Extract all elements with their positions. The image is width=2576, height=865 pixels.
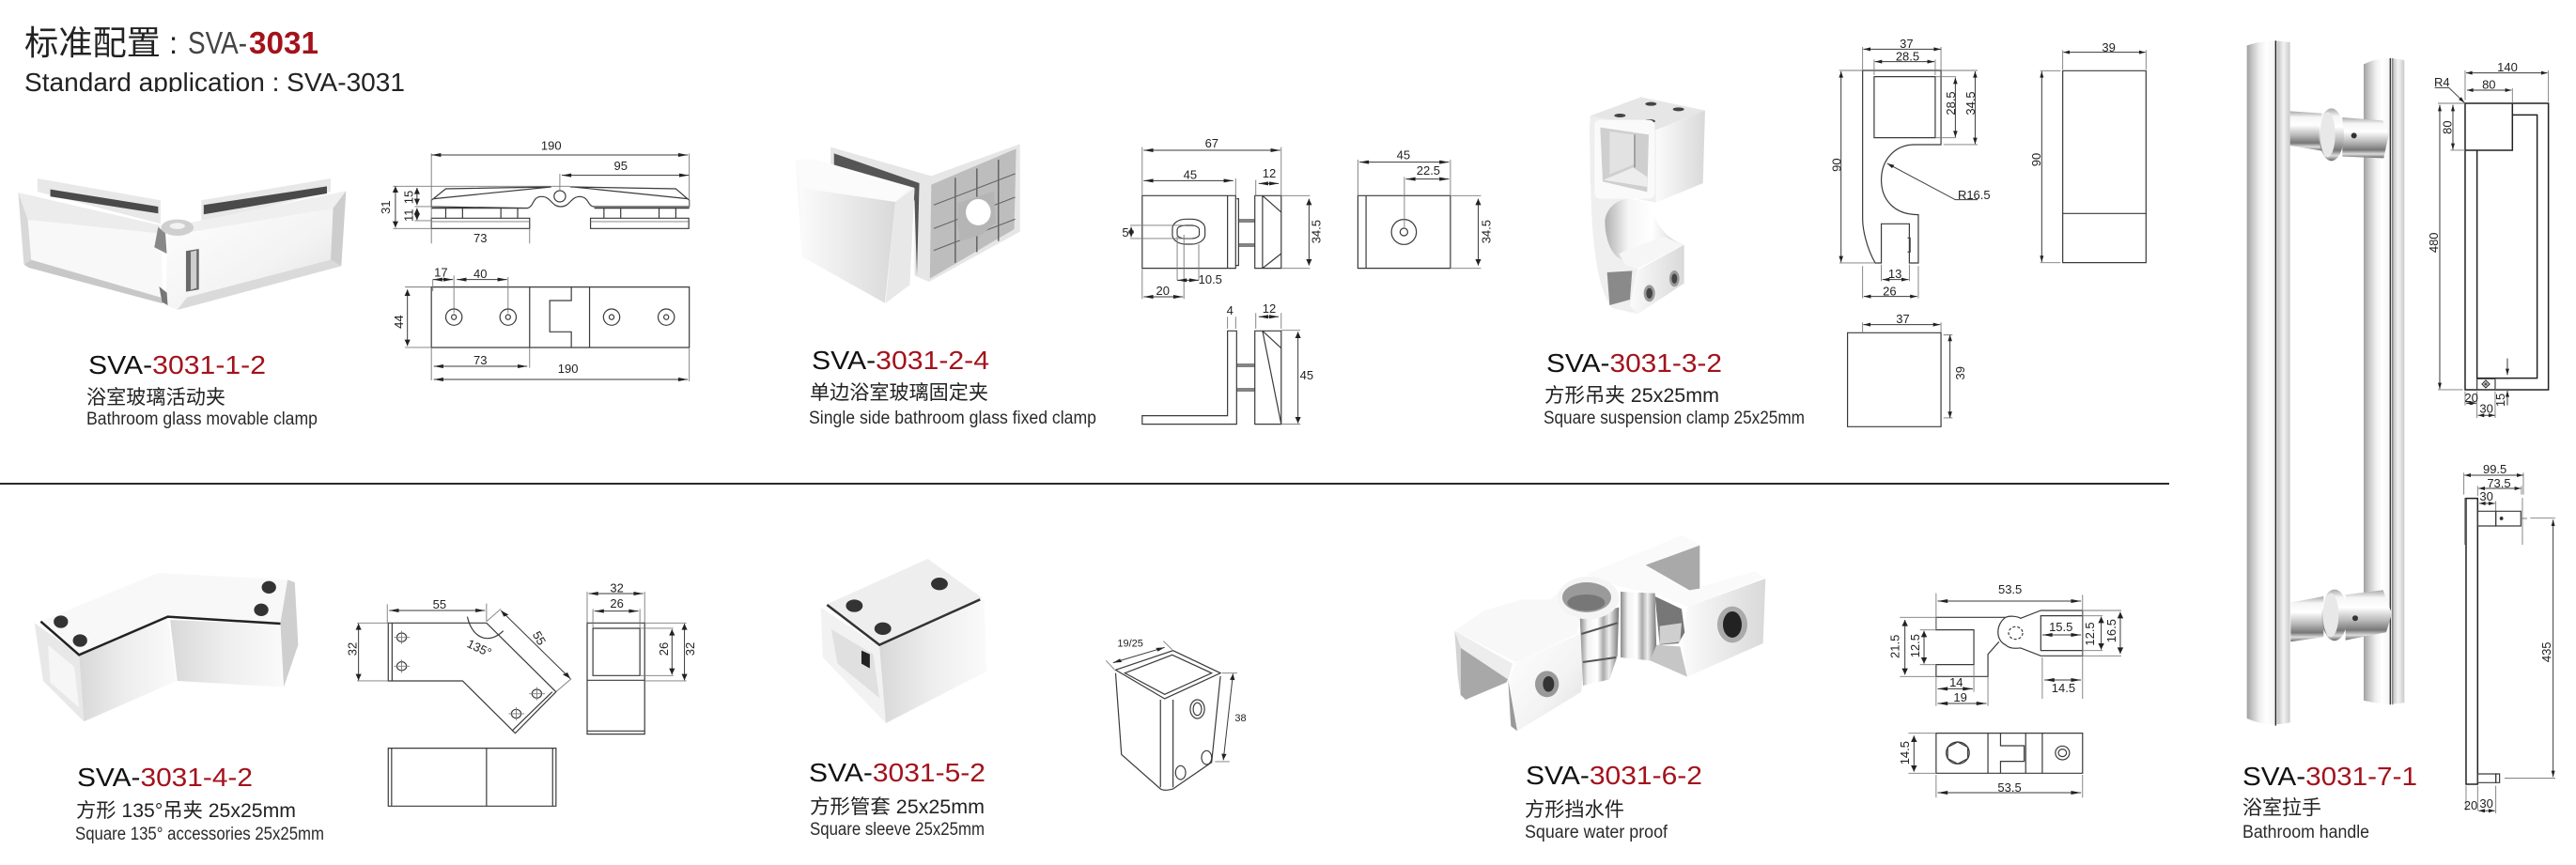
drawing: handle side view: 73.5	[2487, 476, 2511, 490]
drawing: suspension clamp side view: 90	[1830, 158, 1844, 172]
drawing: 135 degree accessory views	[345, 580, 697, 806]
drawing: suspension clamp side view: 28.5	[1944, 91, 1958, 116]
drawing: movable clamp top and plan views: 44	[392, 315, 406, 329]
drawing: fixed clamp views: 10.5	[1199, 272, 1222, 286]
label: SVA-3031-3-2	[1544, 348, 1805, 428]
label: SVA-3031-6-2: 方形挡水件	[1525, 799, 1624, 821]
label: SVA-3031-4-2: 方形 135°吊夹 25x25mm	[76, 800, 296, 822]
drawing: handle side view: 20	[2464, 798, 2477, 812]
drawing: movable clamp top and plan views: 73	[473, 231, 487, 245]
drawing: suspension clamp front view: 39	[2102, 40, 2116, 54]
drawing: 135 degree accessory views: 135°	[465, 637, 494, 659]
drawing: water proof views: 14.5	[1898, 741, 1912, 765]
drawing: handle side view: 30	[2479, 796, 2493, 811]
drawing: fixed clamp views: 4	[1227, 303, 1234, 317]
drawing: 135 degree accessory views: 55	[433, 597, 446, 611]
drawing: movable clamp top and plan views	[379, 138, 690, 381]
drawing: water proof views: 53.5	[1998, 582, 2022, 596]
drawing: movable clamp top and plan views: 40	[473, 267, 487, 281]
drawing: fixed clamp views: 22.5	[1417, 163, 1440, 178]
drawing: movable clamp top and plan views: 31	[379, 200, 393, 214]
drawing: water proof views: 53.5	[1997, 780, 2022, 795]
drawing: water proof views: 12.5	[2083, 622, 2097, 646]
drawing: 135 degree accessory views: 32	[610, 580, 624, 595]
drawing: fixed clamp views: 67	[1205, 136, 1218, 150]
drawing: suspension clamp side view: 13	[1888, 267, 1901, 281]
label: SVA-3031-2-4: SVA-3031-2-4	[812, 346, 989, 375]
photo: movable clamp	[18, 178, 346, 310]
drawing: fixed clamp views: 12	[1263, 166, 1276, 180]
drawing: suspension clamp side view: R16.5	[1958, 188, 1991, 202]
drawing: water proof views: 19	[1953, 690, 1967, 704]
label: SVA-3031-5-2: Square sleeve 25x25mm	[810, 820, 985, 840]
label: SVA-3031-5-2	[809, 758, 985, 840]
drawing: suspension clamp side view: 26	[1883, 284, 1897, 298]
drawing: movable clamp top and plan views: 190	[541, 138, 562, 152]
drawing: fixed clamp views: 45	[1300, 368, 1313, 382]
label: SVA-3031-7-1: SVA-3031-7-1	[2242, 762, 2417, 791]
photo: square sleeve	[821, 559, 986, 723]
drawing: water proof views: 21.5	[1887, 635, 1901, 658]
drawing: suspension clamp side view: 28.5	[1896, 49, 1919, 63]
drawing: fixed clamp views: 34.5	[1480, 220, 1494, 243]
label: SVA-3031-3-2: 方形吊夹 25x25mm	[1544, 385, 1719, 407]
drawing: fixed clamp views: 45	[1397, 147, 1410, 162]
label: SVA-3031-6-2: Square water proof	[1525, 823, 1668, 842]
drawing: suspension clamp front view	[2029, 40, 2146, 263]
drawing: square sleeve isometric	[1106, 639, 1247, 790]
drawing: fixed clamp views: 34.5	[1310, 220, 1324, 243]
panel: SVA-3031-7-1	[2242, 40, 2555, 842]
drawing: handle front view	[2427, 60, 2549, 418]
label: SVA-3031-1-2: SVA-3031-1-2	[88, 350, 266, 379]
drawing: handle side view: 30	[2479, 489, 2493, 503]
drawing: water proof views: 12.5	[1908, 634, 1922, 657]
drawing: square sleeve isometric: 38	[1234, 713, 1247, 724]
drawing: 135 degree accessory views: 32	[345, 642, 359, 656]
drawing: suspension clamp side view: 39	[1953, 366, 1967, 380]
drawing: handle front view: 480	[2427, 232, 2441, 253]
drawing: handle front view: 140	[2497, 60, 2518, 74]
label: SVA-3031-2-4: Single side bathroom glass fixed clamp	[809, 409, 1096, 428]
drawing: square sleeve isometric: 19/25	[1117, 639, 1143, 650]
panel: SVA-3031-1-2	[18, 138, 690, 429]
heading: colon: :	[169, 25, 178, 60]
drawing: handle front view: 30	[2479, 401, 2493, 415]
label: SVA-3031-4-2: Square 135° accessories 25x25mm	[75, 825, 324, 844]
photo: square water proof	[1454, 535, 1765, 731]
photo: fixed clamp	[796, 144, 1020, 303]
drawing: handle front view: 80	[2440, 120, 2454, 134]
label: SVA-3031-7-1	[2242, 762, 2417, 842]
label: SVA-3031-1-2: Bathroom glass movable clamp	[86, 409, 318, 429]
drawing: fixed clamp views: 45	[1184, 167, 1197, 181]
heading: series number: 3031	[249, 25, 318, 60]
label: SVA-3031-5-2: SVA-3031-5-2	[809, 758, 985, 787]
heading: series prefix: SVA-	[188, 25, 247, 60]
panel: SVA-3031-4-2	[35, 573, 697, 844]
drawing: suspension clamp side view	[1830, 37, 1991, 426]
label: SVA-3031-3-2: SVA-3031-3-2	[1546, 348, 1722, 378]
drawing: handle front view: R4	[2434, 75, 2450, 89]
drawing: 135 degree accessory views: 32	[683, 642, 697, 656]
photo: 135 degree accessory	[35, 573, 298, 721]
label: SVA-3031-2-4	[809, 346, 1096, 428]
panel: SVA-3031-2-4	[796, 136, 1494, 428]
drawing: handle front view: 20	[2464, 391, 2478, 405]
drawing: water proof views: 15.5	[2049, 620, 2072, 634]
label: SVA-3031-5-2: 方形管套 25x25mm	[810, 796, 985, 818]
label: SVA-3031-6-2	[1525, 761, 1702, 842]
drawing: movable clamp top and plan views: 17	[434, 265, 448, 279]
label: SVA-3031-1-2	[86, 350, 318, 429]
drawing: 135 degree accessory views: 55	[530, 628, 549, 647]
drawing: 135 degree accessory views: 26	[610, 596, 624, 610]
label: SVA-3031-2-4: 单边浴室玻璃固定夹	[810, 382, 988, 404]
photo: square suspension clamp	[1590, 97, 1705, 314]
label: SVA-3031-6-2: SVA-3031-6-2	[1526, 761, 1702, 790]
drawing: suspension clamp front view: 90	[2029, 153, 2043, 166]
drawing: movable clamp top and plan views: 190	[558, 362, 578, 376]
drawing: water proof views: 14.5	[2052, 681, 2075, 695]
drawing: movable clamp top and plan views: 73	[473, 353, 487, 367]
panel: SVA-3031-5-2	[809, 559, 1247, 840]
drawing: fixed clamp views: 20	[1156, 284, 1170, 298]
drawing: 135 degree accessory views: 26	[657, 642, 671, 656]
drawing: water proof views	[1887, 582, 2121, 797]
label: SVA-3031-4-2	[75, 763, 324, 844]
drawing: movable clamp top and plan views: 11	[402, 209, 416, 222]
drawing: handle front view: 15	[2493, 394, 2507, 407]
label: SVA-3031-7-1: 浴室拉手	[2242, 797, 2321, 819]
drawing: handle side view: 435	[2539, 641, 2553, 662]
drawing: fixed clamp views: 12	[1263, 301, 1276, 316]
drawing: suspension clamp side view: 37	[1900, 37, 1914, 51]
drawing: suspension clamp side view: 37	[1896, 312, 1910, 326]
panel: SVA-3031-3-2	[1544, 37, 2146, 428]
drawing: suspension clamp side view: 34.5	[1963, 91, 1978, 116]
drawing: fixed clamp views: 5	[1122, 225, 1129, 239]
label: SVA-3031-7-1: Bathroom handle	[2242, 823, 2369, 842]
drawing: movable clamp top and plan views: 95	[613, 159, 628, 173]
drawing: movable clamp top and plan views: 15	[402, 191, 416, 204]
drawing: handle side view: 99.5	[2483, 462, 2506, 476]
photo: bathroom handle	[2247, 40, 2404, 726]
drawing: handle front view: 80	[2482, 77, 2496, 91]
drawing: water proof views: 14	[1949, 675, 1963, 689]
subtitle: Standard application : SVA-3031	[24, 68, 405, 97]
heading: Chinese: 标准配置	[24, 23, 161, 62]
drawing: water proof views: 16.5	[2104, 619, 2118, 642]
label: SVA-3031-4-2: SVA-3031-4-2	[77, 763, 253, 792]
label: SVA-3031-1-2: 浴室玻璃活动夹	[86, 387, 225, 409]
title	[24, 23, 318, 62]
drawing: fixed clamp views	[1122, 136, 1494, 425]
label: SVA-3031-3-2: Square suspension clamp 25x25mm	[1544, 409, 1805, 428]
panel: SVA-3031-6-2	[1454, 535, 2121, 842]
drawing: handle side view	[2464, 462, 2555, 813]
